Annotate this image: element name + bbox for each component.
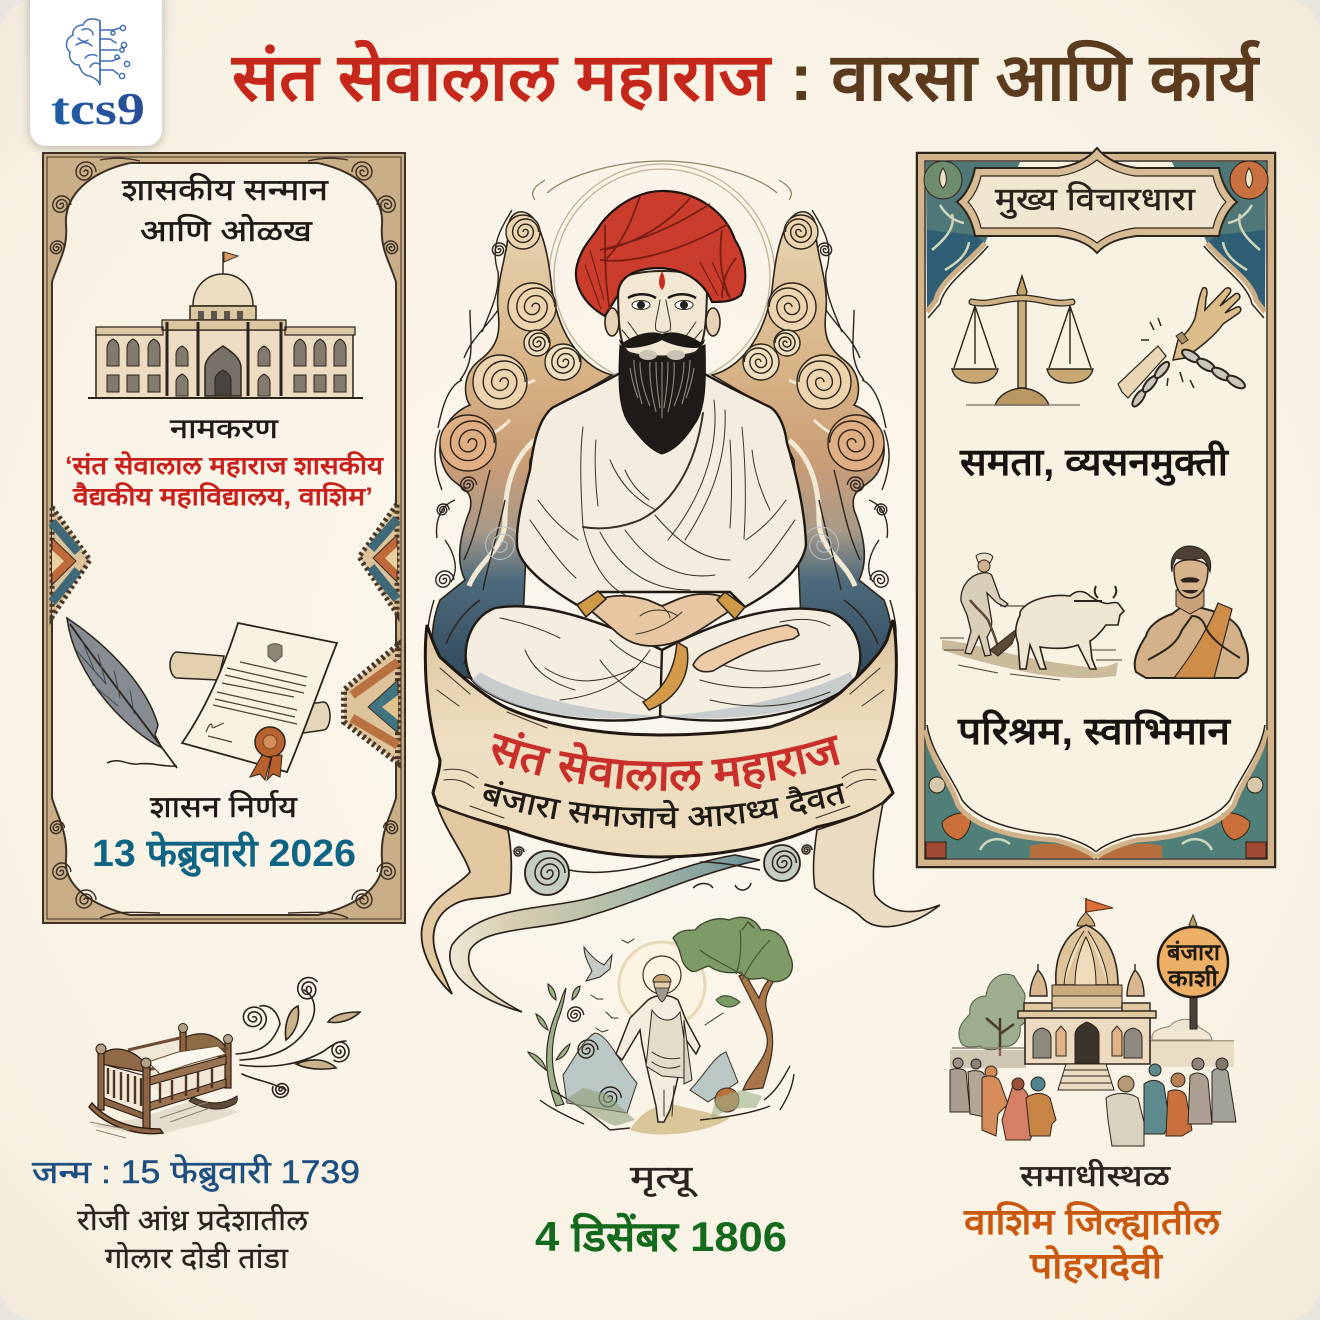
- devotees left: [950, 1058, 1056, 1140]
- badge: Banjara Kashi: बंजारा: [1166, 939, 1221, 965]
- banner ribbon: [424, 620, 898, 858]
- crossed legs: [466, 606, 860, 721]
- panel: main ideology: [917, 148, 1275, 867]
- title: [230, 39, 1261, 114]
- icon: praying man: [1135, 546, 1248, 678]
- college name: [65, 451, 385, 511]
- icon: scroll document with seal: [170, 623, 337, 780]
- birth date: जन्म : 15 फेब्रुवारी 1739: [32, 1154, 360, 1192]
- college name: वैद्यकीय महाविद्यालय, वाशिम’: [72, 482, 373, 511]
- aura right swirls (mirror): [712, 210, 896, 690]
- samadhi place: वाशिम जिल्ह्यातील: [963, 1201, 1222, 1242]
- section heading: आणि ओळख: [140, 214, 313, 248]
- icon: balance scales: [952, 276, 1093, 405]
- decision label: शासन निर्णय: [150, 790, 298, 824]
- face: [605, 271, 720, 360]
- samadhi label: समाधीस्थळ: [1020, 1159, 1171, 1193]
- illustration: saint departing with tree: [528, 917, 794, 1134]
- halo rings: [533, 161, 791, 390]
- beard and neck: [619, 345, 705, 454]
- icon: circuit brain: [66, 19, 130, 85]
- samadhi place: [963, 1201, 1222, 1286]
- logo card: [30, 0, 162, 146]
- heading plaque: मुख्य विचारधारा: [995, 181, 1196, 219]
- heading plaque: [957, 148, 1237, 253]
- turban: [576, 191, 745, 316]
- ornate frame: [43, 153, 405, 923]
- icon: farmer ploughing with ox: [940, 553, 1124, 680]
- badge: Banjara Kashi: [1158, 915, 1228, 1029]
- central illustration: saint: [420, 160, 940, 1013]
- death date: 4 डिसेंबर 1806: [535, 1212, 787, 1260]
- icon: government building: [88, 252, 363, 398]
- section heading: [122, 173, 330, 248]
- ribbon tails: [422, 803, 940, 1012]
- icon: hand breaking chains: [1118, 288, 1247, 408]
- banner subtitle: बंजारा समाजाचे आराध्य दैवत: [483, 781, 844, 828]
- icon: quill: [67, 618, 177, 768]
- icon: wind swirls: [236, 973, 360, 1100]
- banner name: संत सेवालाल महाराज: [492, 732, 840, 792]
- title: : वारसा आणि कार्य: [790, 39, 1261, 114]
- icon: wooden cradle: [89, 1024, 240, 1138]
- robe drape folds: [530, 400, 795, 595]
- tribal pattern fragments: [52, 504, 398, 763]
- decision date: 13 फेब्रुवारी 2026: [92, 831, 356, 877]
- birth section: [32, 973, 360, 1275]
- arched frame: [917, 153, 1275, 867]
- aura left swirls: [428, 210, 612, 690]
- logo wordmark: tcs9: [51, 84, 145, 134]
- clasped hands: [577, 591, 745, 646]
- section heading: शासकीय सन्मान: [122, 173, 330, 207]
- college name: ‘संत सेवालाल महाराज शासकीय: [65, 451, 385, 480]
- samadhi section: [950, 898, 1236, 1286]
- illustration: temple with devotees: [950, 898, 1236, 1146]
- birth place: रोजी आंध्र प्रदेशातील: [77, 1204, 309, 1237]
- samadhi place: पोहरादेवी: [1029, 1245, 1164, 1286]
- title: संत सेवालाल महाराज: [230, 39, 772, 114]
- death section: [528, 917, 794, 1260]
- panel: government honour and recognition: [43, 153, 405, 923]
- naming label: नामकरण: [170, 413, 279, 444]
- badge: Banjara Kashi: काशी: [1167, 964, 1219, 991]
- birth place: गोलार दोडी तांडा: [105, 1242, 289, 1275]
- birth place: [77, 1204, 309, 1275]
- equality and de-addiction label: समता, व्यसनमुक्ती: [959, 440, 1229, 486]
- hard work and self-respect label: परिश्रम, स्वाभिमान: [957, 709, 1232, 753]
- devotees right: [1106, 1058, 1236, 1146]
- death label: मृत्यू: [630, 1159, 699, 1197]
- robe torso: [517, 373, 806, 607]
